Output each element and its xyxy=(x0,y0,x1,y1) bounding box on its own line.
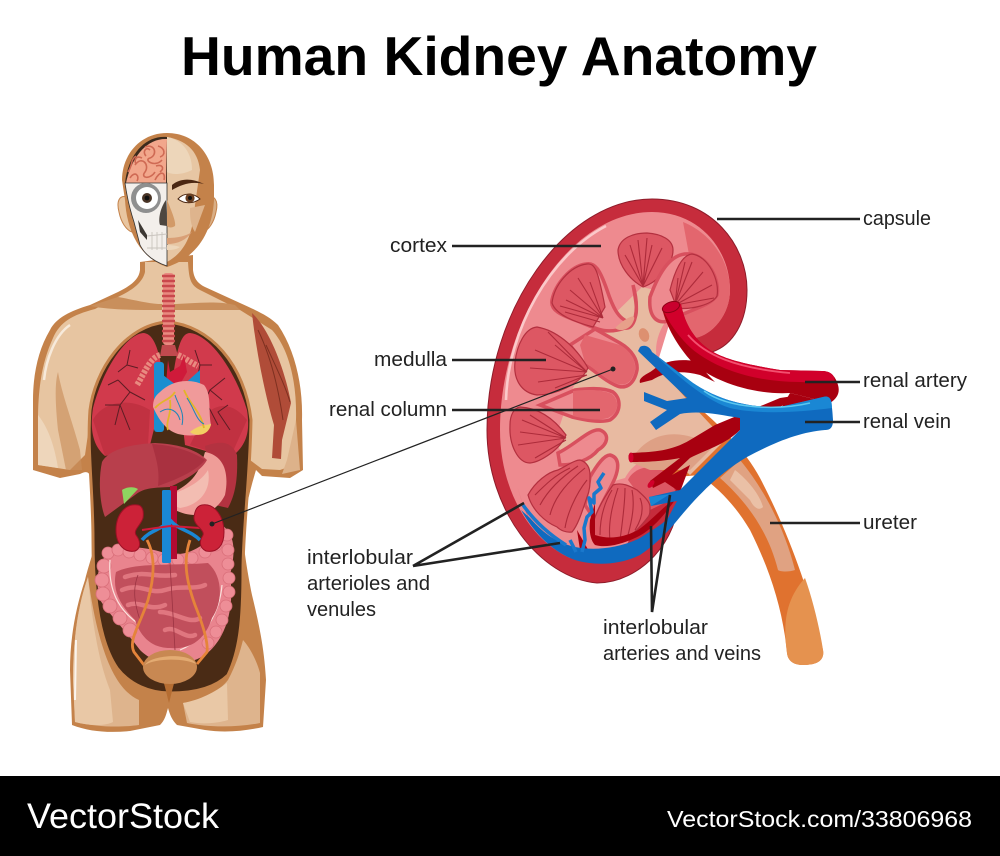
lungs xyxy=(92,333,248,458)
labels xyxy=(307,207,968,665)
arm muscle xyxy=(252,313,291,459)
title: Human Kidney Anatomy xyxy=(181,25,817,87)
trachea xyxy=(137,273,198,385)
labels: interlobular xyxy=(307,546,413,569)
labels: arteries and veins xyxy=(603,642,761,665)
leader lines xyxy=(210,219,860,612)
labels: arterioles and xyxy=(307,572,430,595)
renal vein xyxy=(521,346,833,564)
renal pelvis interior xyxy=(555,287,725,485)
kidney cross-section diagram xyxy=(487,199,839,665)
liver xyxy=(100,443,207,517)
human body figure xyxy=(33,133,303,732)
labels: interlobular xyxy=(603,616,708,639)
vena cava and aorta xyxy=(142,486,200,563)
large intestine xyxy=(95,525,235,664)
ureters xyxy=(132,540,207,665)
cortex xyxy=(500,212,730,558)
footer bar: VectorStock.com/33806968 xyxy=(667,806,972,832)
face features xyxy=(167,180,205,250)
head xyxy=(118,133,217,267)
ureter and renal pelvis xyxy=(570,285,823,665)
lower renal artery branches xyxy=(628,395,800,492)
labels: capsule xyxy=(863,207,931,230)
footer bar xyxy=(0,776,1000,856)
small kidney right xyxy=(194,505,224,551)
abdominal cavity xyxy=(89,322,251,693)
body silhouette xyxy=(33,255,303,732)
medulla pyramids xyxy=(510,233,717,544)
labels: renal vein xyxy=(863,410,951,433)
labels: renal column xyxy=(329,398,447,421)
labels: renal artery xyxy=(863,369,968,392)
labels: venules xyxy=(307,598,376,621)
small intestine xyxy=(115,563,220,650)
interlobular veins xyxy=(523,473,604,552)
renal artery xyxy=(640,299,839,415)
renal pelvis shadow xyxy=(630,434,712,470)
brain xyxy=(126,139,167,183)
bladder xyxy=(143,650,197,703)
heart xyxy=(153,355,211,435)
labels: cortex xyxy=(390,234,448,257)
footer bar: VectorStock xyxy=(27,797,220,836)
small kidney left xyxy=(116,505,143,551)
skull xyxy=(125,183,167,266)
capsule xyxy=(487,199,747,583)
labels: medulla xyxy=(374,348,448,371)
spleen and stomach xyxy=(172,443,237,515)
interlobular arteries xyxy=(517,486,677,553)
labels: ureter xyxy=(863,511,917,534)
